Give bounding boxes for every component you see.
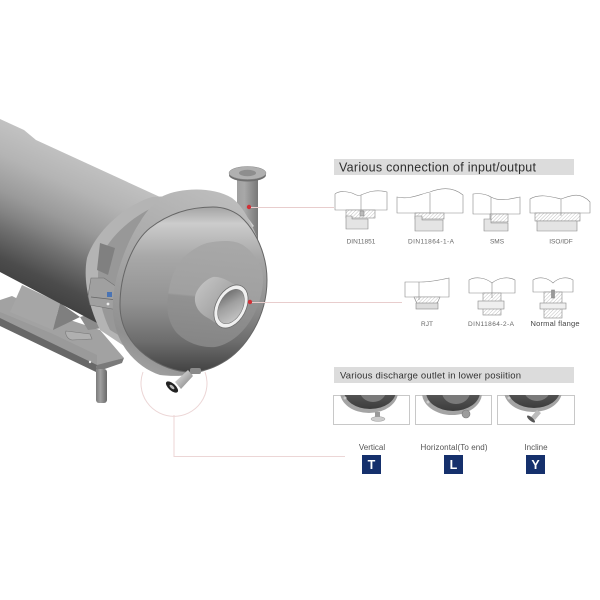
heading: discharge outlet [334,367,574,383]
drain outlet [164,368,201,395]
inlet port [195,277,255,334]
cylinder body [0,119,160,345]
pump illustration [0,119,267,403]
connection diagram: DIN11864-1-A: DIN11864-1-A [408,238,455,246]
connection diagram: SMS: SMS [490,238,505,246]
badge T: T [368,458,376,472]
cover face [167,241,263,347]
base frame [0,285,124,403]
connection diagram: DIN11851: DIN11851 [347,238,376,246]
connection diagram: DIN11851 [335,191,387,246]
badge L: L [450,458,458,472]
callout leader: lower outlet circle [141,372,345,456]
outlet pipe top [229,166,266,245]
option: horizontal outlet: Horizontal(To end) [420,443,488,452]
support leg [96,369,107,403]
connection diagram: Normal flange: Normal flange [530,319,580,328]
connection diagram: RJT: RJT [421,321,433,328]
clamp band [86,195,190,350]
flange ring [113,190,264,376]
connection diagram: SMS [473,194,520,246]
heading: connections: Various connection of input/output [339,160,537,174]
connection diagram: RJT [405,278,449,328]
pump cover dome [120,207,267,372]
callout leader: inlet [248,300,402,304]
connection diagram: DIN11864-2-A [468,278,515,328]
connection diagram: ISO/IDF: ISO/IDF [549,238,573,246]
option: vertical outlet [333,395,410,474]
heading: discharge outlet: Various discharge outlet in lower posiition [340,370,521,382]
badge Y: Y [531,458,540,472]
connection diagram: Normal flange [530,278,580,328]
connection diagram: ISO/IDF [530,195,590,246]
option: incline outlet [497,395,575,474]
option: horizontal outlet [415,395,492,474]
callout leader: top outlet [247,205,334,209]
option: incline outlet: Incline [524,443,548,452]
option: vertical outlet: Vertical [359,443,385,452]
connection diagram: DIN11864-1-A [397,189,463,246]
connection diagram: DIN11864-2-A: DIN11864-2-A [468,321,515,328]
